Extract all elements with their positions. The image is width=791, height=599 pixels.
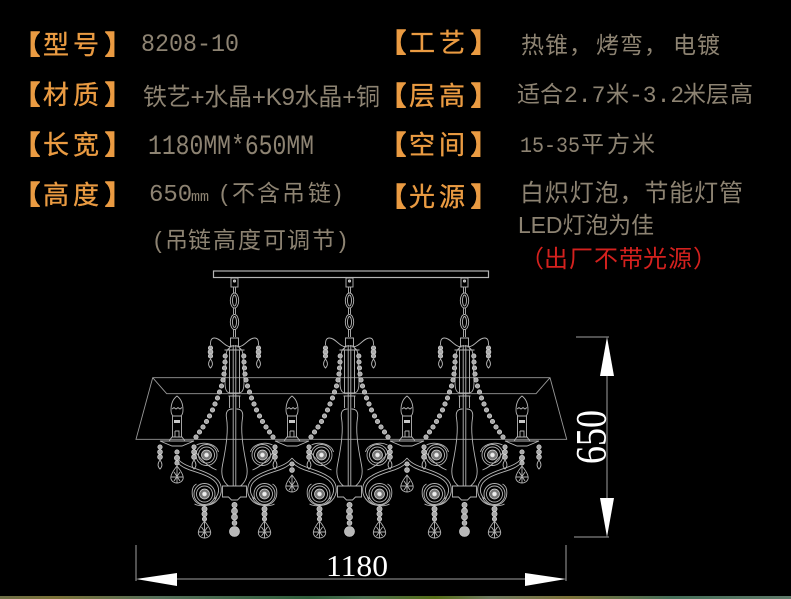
- bottom colored strip: [0, 596, 791, 599]
- label: length and width: 【长宽】: [14, 125, 131, 162]
- value: model number: 8208-10: [141, 30, 239, 59]
- value: floor height: 米: [606, 81, 629, 107]
- chandelier unit left: [177, 278, 292, 538]
- note: chain height adjustable: (吊链高度可调节): [154, 227, 347, 253]
- value: floor height: 适合: [517, 81, 563, 107]
- width value: 1180: [326, 548, 388, 583]
- value: material: 铁艺+水晶+K9水晶+铜: [143, 84, 380, 111]
- height dimension: [568, 337, 616, 537]
- value: length and width: 1180MM*650MM: [148, 132, 314, 163]
- value: floor height: 2.7: [564, 83, 605, 109]
- value: floor height: 米层高: [683, 81, 753, 107]
- value: height: mm: [191, 189, 209, 206]
- label: light source: 【光源】: [380, 177, 497, 214]
- value: height: 650: [149, 182, 192, 209]
- hanging crystal drops: [171, 450, 528, 492]
- label: floor height: 【层高】: [380, 76, 497, 113]
- red note: light source not included: （出厂不带光源）: [520, 246, 717, 273]
- lamp shade: [136, 378, 567, 439]
- ceiling bar: [214, 271, 488, 278]
- label: craft: 【工艺】: [380, 23, 497, 60]
- height value: 650: [568, 410, 616, 464]
- label: space: 【空间】: [380, 125, 497, 162]
- value: light source line two: LED灯泡为佳: [518, 212, 654, 238]
- value: space: 平方米: [581, 131, 655, 157]
- chandelier drawing: [136, 271, 567, 538]
- label: height: 【高度】: [14, 175, 131, 212]
- arrow: left: [136, 573, 177, 586]
- width dimension: [136, 545, 566, 586]
- value: light source line one: 白炽灯泡，节能灯管: [520, 180, 743, 207]
- value: space: 15-35: [520, 134, 580, 159]
- candles: [158, 396, 541, 469]
- value: height: (不含吊链): [220, 180, 342, 206]
- label: material: 【材质】: [14, 75, 131, 112]
- value: craft: 热锥，烤弯，电镀: [521, 32, 720, 58]
- arrow: up: [600, 337, 614, 376]
- label: model: 【型号】: [14, 25, 131, 62]
- arrow: right: [525, 573, 566, 586]
- chandelier unit centre: [292, 278, 407, 538]
- chandelier unit right: [407, 278, 522, 538]
- arrow: down: [600, 498, 614, 537]
- value: floor height: -3.2: [629, 83, 684, 109]
